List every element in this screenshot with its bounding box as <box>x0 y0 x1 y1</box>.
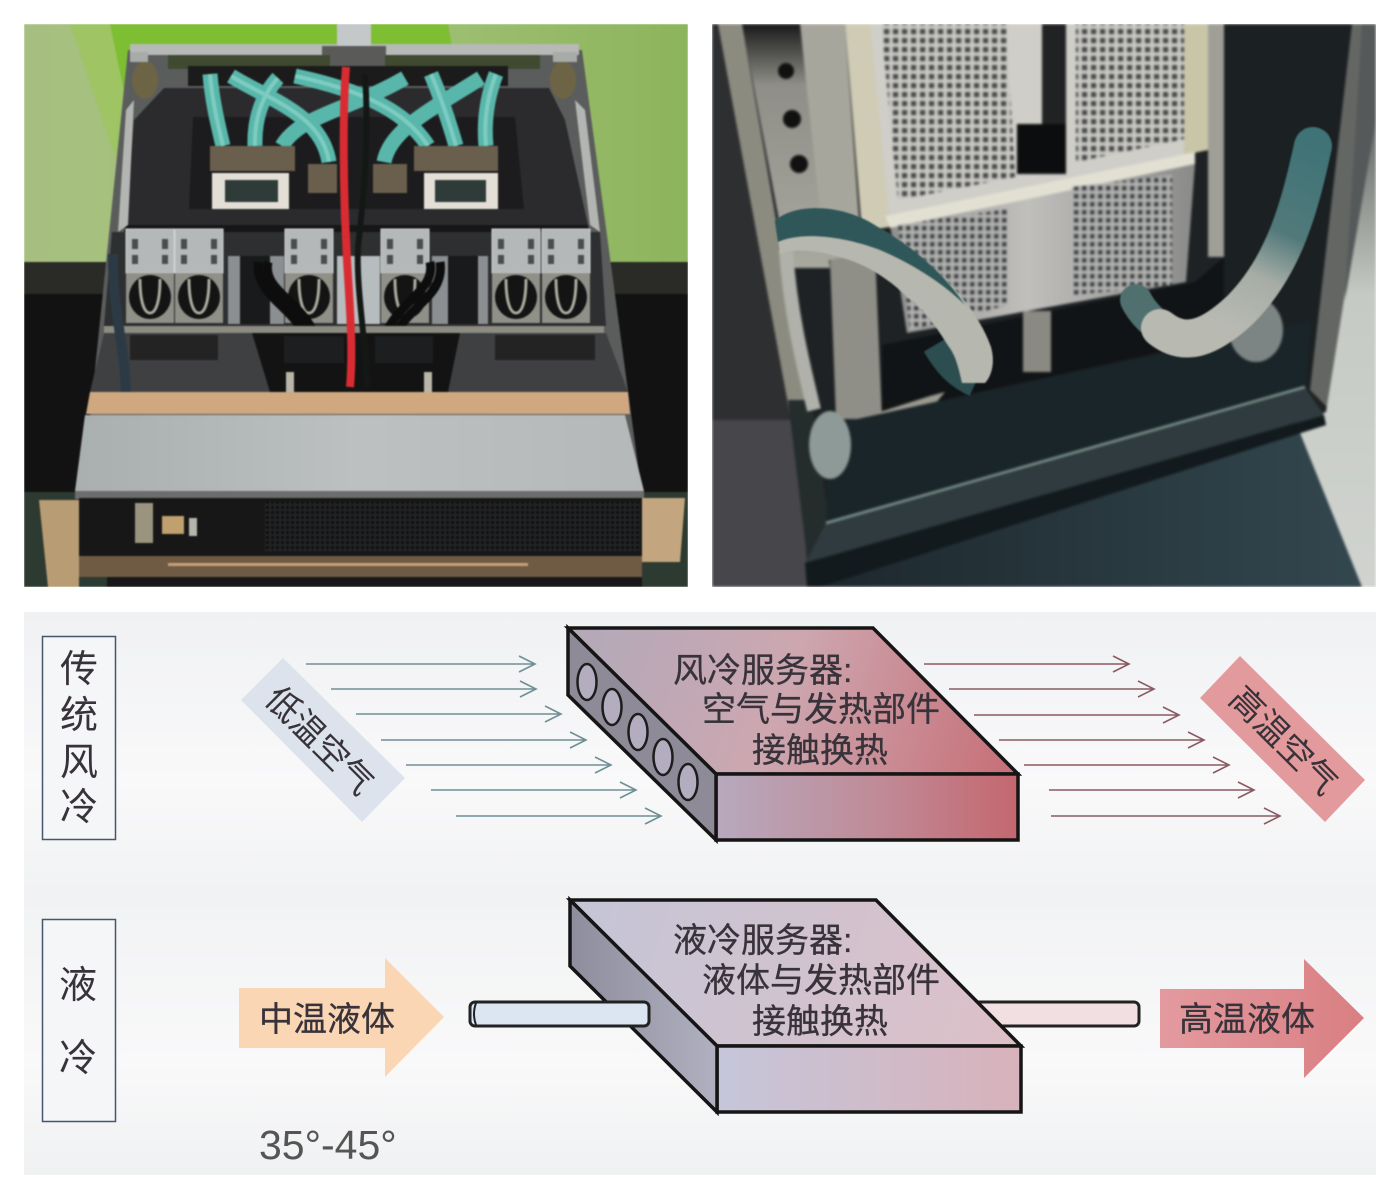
red and black power cables <box>344 67 351 387</box>
label: traditional air cooling: 风 <box>60 742 98 784</box>
fan bay background <box>104 232 606 326</box>
label: liquid cooling <box>42 920 116 1122</box>
liquid-cooled server text: 液冷服务器: <box>673 922 852 960</box>
processors <box>212 173 289 209</box>
warm air arrows <box>924 656 1280 824</box>
high-temperature liquid arrow <box>1160 959 1364 1078</box>
air-cooled server text: 接触换热 <box>752 732 888 770</box>
lower bay <box>882 259 1224 410</box>
right dark frame <box>1224 24 1354 394</box>
medium-temperature liquid arrow: 中温液体 <box>259 1001 395 1039</box>
low-temperature air tag <box>241 658 405 822</box>
panel: air vs liquid cooling diagram <box>24 612 1376 1175</box>
label: traditional air cooling: 冷 <box>60 787 98 829</box>
air holes <box>578 664 698 800</box>
lower compartment <box>90 333 628 392</box>
left hose <box>775 146 1313 384</box>
liquid-cooled server text: 接触换热 <box>752 1003 888 1041</box>
front panel <box>79 498 642 556</box>
floor and left wall <box>712 24 790 420</box>
temperature range note: 35°-45° <box>259 1122 397 1168</box>
label: traditional air cooling <box>42 636 116 840</box>
glass feet <box>1229 298 1283 362</box>
liquid-cooled server text <box>673 922 940 1041</box>
photo: liquid-cooled cabinet rear with coolant hoses <box>712 24 1376 587</box>
air-cooled server text: 风冷服务器: <box>673 652 852 690</box>
coolant tubes <box>210 74 496 162</box>
hot outlet pipe <box>960 1002 1139 1026</box>
high-temperature air tag <box>1200 656 1365 822</box>
silver posts <box>742 24 830 268</box>
gold fittings <box>132 61 158 99</box>
server mesh panels <box>870 24 1195 225</box>
power supply units <box>126 229 174 323</box>
black cable bundles <box>258 262 440 335</box>
right hose <box>1136 300 1164 330</box>
low-temperature air tag: 低温空气 <box>257 679 381 803</box>
air-cooled server text: 空气与发热部件 <box>702 691 940 729</box>
cold inlet pipe <box>470 1002 649 1026</box>
air-cooled server block <box>568 628 1018 840</box>
medium-temperature liquid arrow <box>239 958 444 1077</box>
tan divider and metal lid <box>86 392 630 414</box>
label: liquid cooling: 冷 <box>59 1038 97 1080</box>
liquid-cooled server text: 液体与发热部件 <box>702 962 940 1000</box>
label: traditional air cooling: 统 <box>60 695 98 737</box>
black tray <box>126 88 588 225</box>
cool air arrows <box>306 656 661 824</box>
chassis side rails and interior <box>82 50 642 495</box>
cabinet base <box>858 346 1226 440</box>
label: liquid cooling: 液 <box>59 965 97 1007</box>
air-cooled server text <box>673 652 940 770</box>
bolts <box>778 63 794 79</box>
label: traditional air cooling: 传 <box>60 649 98 691</box>
photo: air-cooled server chassis viewed from above <box>24 24 688 587</box>
high-temperature liquid arrow: 高温液体 <box>1179 1001 1315 1039</box>
liquid-cooled server block <box>570 900 1021 1112</box>
high-temperature air tag: 高温空气 <box>1221 679 1345 803</box>
tube connectors <box>210 146 498 193</box>
